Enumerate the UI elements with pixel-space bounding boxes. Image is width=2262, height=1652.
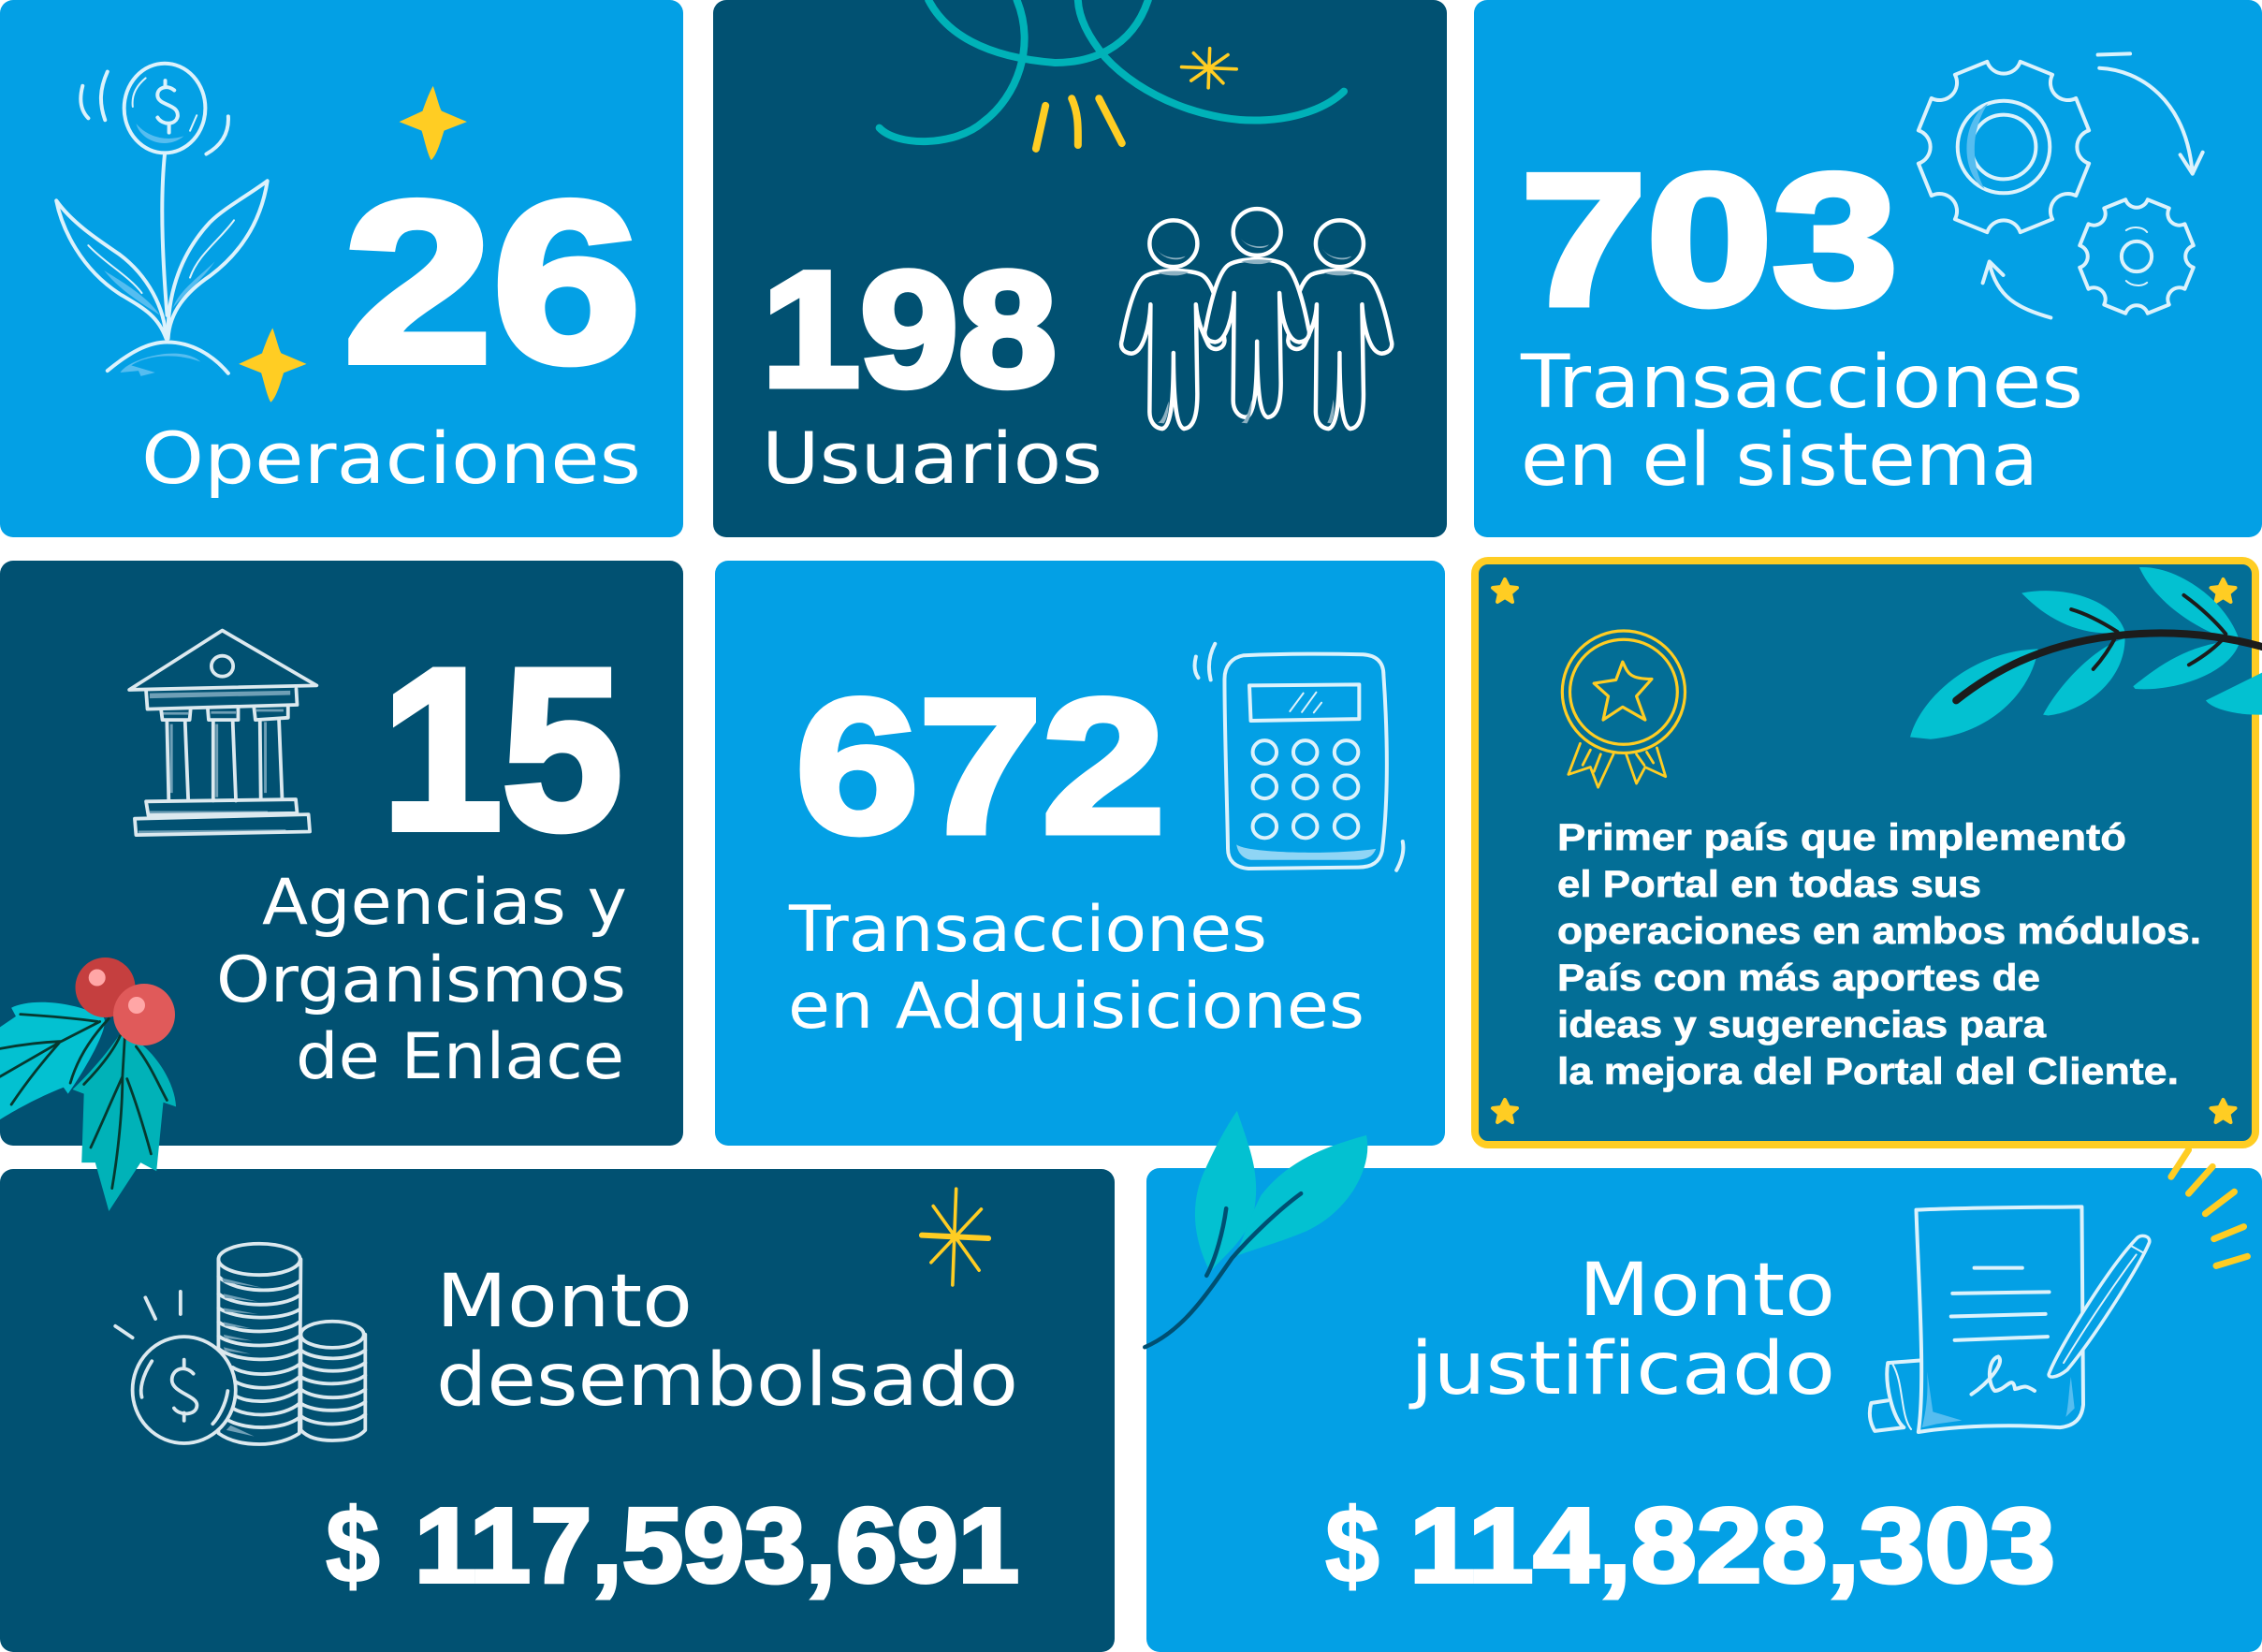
text: callout body: Primer país que implementó — [1557, 817, 2126, 858]
icon: medal — [1562, 631, 1686, 787]
panel: usuarios — [713, 0, 1447, 537]
icon: sparkle bottom — [239, 329, 307, 402]
number: 15: 15 — [382, 621, 622, 877]
decoration: twin leaves — [1145, 1111, 1367, 1347]
label: monto desembolsado: Monto — [436, 1260, 693, 1344]
label: operaciones: Operaciones — [141, 417, 641, 500]
text: callout body: ideas y sugerencias para — [1557, 1004, 2047, 1045]
icon: sparkle top — [400, 86, 467, 160]
label: transacciones en el sistema — [1520, 341, 2083, 503]
decoration: yellow asterisk — [1182, 49, 1236, 88]
icon: money plant — [56, 64, 268, 376]
number: 703: 703 — [1521, 136, 1898, 344]
number: 117,593,691: 117,593,691 — [415, 1486, 1019, 1604]
icon: coin stacks — [115, 1244, 365, 1444]
label: agencias y organismos de enlace: de Enlace — [296, 1020, 624, 1094]
panel: operaciones — [0, 0, 683, 537]
label: monto desembolsado — [436, 1260, 1018, 1423]
icon: bank building — [129, 631, 316, 835]
label: monto justificado: Monto — [1579, 1249, 1835, 1333]
text: callout body: el Portal en todas sus — [1557, 864, 1981, 905]
number: 672: 672 — [795, 660, 1165, 873]
label: transacciones en adquisiciones: en Adquisiciones — [788, 970, 1364, 1044]
number: 198: 198 — [762, 239, 1057, 421]
icon: stars at corners — [1493, 579, 2235, 1122]
decoration: holly with berries — [0, 958, 176, 1211]
number: 114,828,303: 114,828,303 — [1409, 1486, 2055, 1604]
panel: transacciones en el sistema — [1474, 0, 2262, 537]
decoration: yellow dashes — [2171, 1150, 2247, 1265]
label: transacciones en el sistema: Transacciones — [1520, 341, 2083, 425]
text: callout body: País con más aportes de — [1557, 958, 2040, 999]
decoration: yellow ticks — [1036, 98, 1122, 149]
label: monto justificado: justificado — [1408, 1327, 1835, 1411]
label: monto desembolsado: desembolsado — [436, 1338, 1018, 1423]
text: callout body: la mejora del Portal del Cliente. — [1557, 1051, 2179, 1092]
label: transacciones en adquisiciones: Transacciones — [788, 893, 1267, 967]
text: callout body — [1557, 817, 2201, 1092]
label: agencias y organismos de enlace: Agencias y — [262, 866, 627, 940]
label: transacciones en el sistema: en el sistema — [1521, 418, 2038, 503]
number: 26: 26 — [343, 154, 641, 410]
icon: large gear — [1919, 62, 2089, 232]
decoration: teal scribble — [880, 0, 1344, 141]
label: agencias y organismos de enlace — [216, 866, 627, 1094]
text: callout body: operaciones en ambos módulos. — [1557, 911, 2201, 952]
label: agencias y organismos de enlace: Organismos — [216, 943, 626, 1017]
panel: primer pais callout — [1475, 561, 2262, 1145]
number: 114,828,303: $ — [1325, 1487, 1379, 1604]
panel: monto justificado — [1146, 1168, 2262, 1652]
panel: transacciones en adquisiciones — [715, 561, 1445, 1146]
label: monto justificado — [1408, 1249, 1835, 1411]
panel: monto desembolsado — [0, 1169, 1115, 1652]
icon: calculator — [1194, 644, 1403, 870]
icon: document and pen — [1870, 1206, 2150, 1432]
label: transacciones en adquisiciones — [788, 893, 1364, 1044]
decoration: yellow asterisk — [922, 1189, 988, 1285]
icon: three people — [1121, 209, 1392, 429]
label: usuarios: Usuarios — [762, 417, 1102, 500]
number: 117,593,691: $ — [326, 1487, 380, 1604]
icon: small gear — [2080, 199, 2194, 314]
icon: rotation arrows — [1983, 53, 2203, 317]
panel: agencias y organismos — [0, 561, 683, 1146]
decoration: leaf branch — [1910, 567, 2262, 739]
